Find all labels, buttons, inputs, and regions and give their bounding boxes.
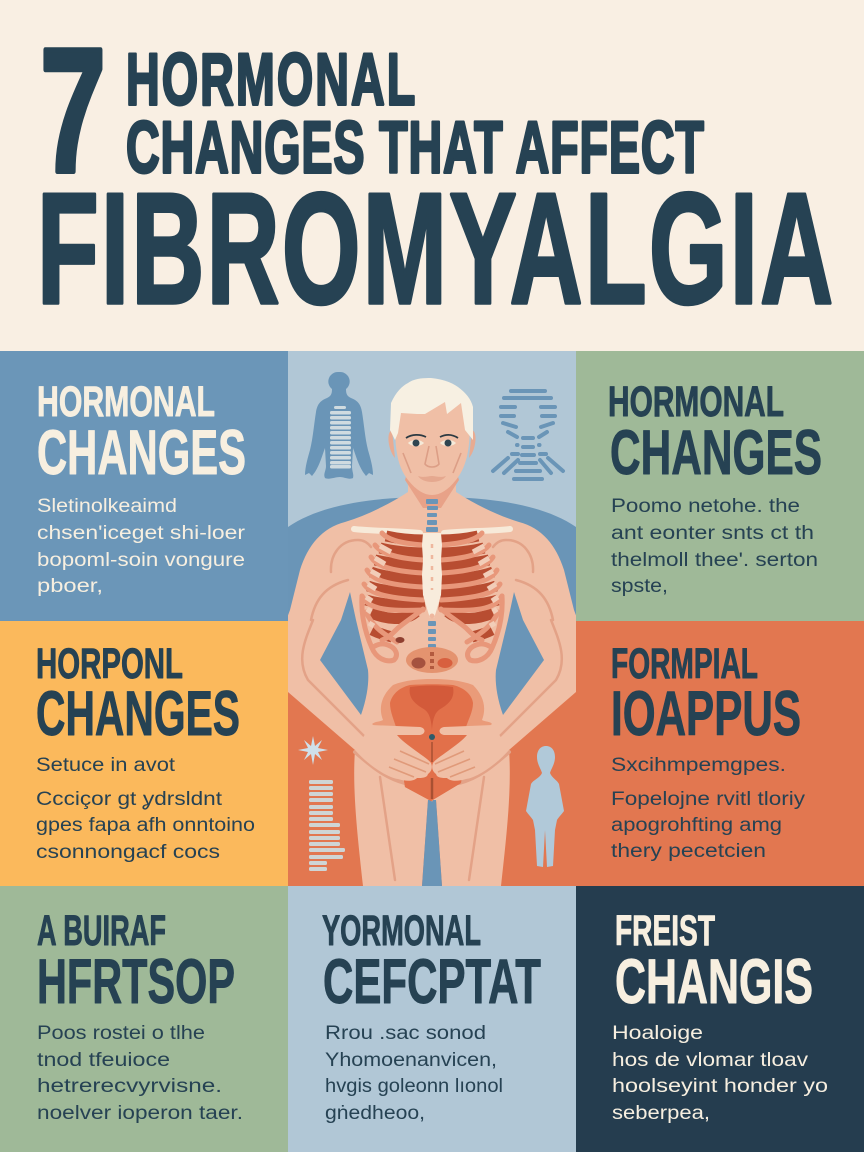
brows xyxy=(406,435,458,438)
text block: hetrerecvyrvisne. xyxy=(37,1076,222,1097)
text block xyxy=(37,1023,243,1124)
text block: gṅedheoo, xyxy=(325,1103,425,1124)
text block: hoolseyint honder yo xyxy=(612,1076,828,1097)
text block: ant eonter snts ct th xyxy=(611,523,814,544)
lower pelvis xyxy=(397,735,467,801)
text block: chsen'iceget shi-loer xyxy=(37,523,246,544)
text block: Setuce in avot xyxy=(36,755,176,776)
icon: small standing person xyxy=(526,746,564,867)
heading: CHANGES xyxy=(36,679,240,749)
heading: CHANGES xyxy=(37,418,246,488)
heading: FORMPIAL xyxy=(611,640,758,688)
title line 1: HORMONAL xyxy=(126,39,415,120)
text block: Poos rostei o tlhe xyxy=(37,1023,205,1044)
heading: FREIST xyxy=(615,907,715,955)
body contour lines xyxy=(302,540,562,880)
neck shading xyxy=(405,477,459,508)
abdominal organ xyxy=(406,647,458,673)
icon: body silhouette with spine xyxy=(305,372,373,479)
panel: middle right xyxy=(576,621,864,886)
text block: thelmoll thee'. serton xyxy=(611,550,818,571)
text block: Hoaloige xyxy=(612,1023,703,1044)
title line 2: CHANGES THAT AFFECT xyxy=(126,107,704,188)
text block: Poomo netohe. the xyxy=(611,496,800,517)
face xyxy=(396,402,470,495)
text block xyxy=(611,496,818,597)
navel xyxy=(429,734,435,740)
text block: apogrohfting amg xyxy=(611,815,782,836)
heading xyxy=(615,907,813,1017)
text block: csonnongacf cocs xyxy=(36,842,220,863)
text block: Ccciçor ɡt ỿdrsldnt xyxy=(36,789,223,810)
text block: Rrou .sac sonod xyxy=(325,1023,486,1044)
ears xyxy=(388,430,476,458)
text block xyxy=(612,1023,828,1124)
heading: HFRTSOP xyxy=(37,947,235,1017)
panel: middle left xyxy=(0,621,288,886)
heading: A BUIRAF xyxy=(37,907,166,955)
text block: Sletinolkeaimd xyxy=(37,496,177,517)
hands xyxy=(355,725,509,781)
hair xyxy=(390,378,473,440)
text block: Yhomoenanvicen, xyxy=(325,1050,497,1071)
text block xyxy=(611,755,806,862)
heading xyxy=(611,640,801,749)
clavicles xyxy=(354,529,510,533)
spine upper xyxy=(426,499,438,532)
pelvis organ xyxy=(372,679,492,802)
head xyxy=(388,378,476,495)
anatomical figure xyxy=(275,378,589,886)
spine lower xyxy=(428,621,436,648)
text block: gpes fapa afh onntoino xyxy=(36,815,255,836)
heading xyxy=(37,907,235,1017)
text block: hvgis goleonn lıonol xyxy=(325,1076,503,1097)
rib cage left xyxy=(362,533,425,661)
left lower organ spot xyxy=(396,637,404,643)
rib cage right xyxy=(439,533,502,661)
text block xyxy=(325,1023,503,1124)
text block xyxy=(37,496,246,597)
text block: pboer, xyxy=(37,576,103,597)
heading xyxy=(322,907,541,1017)
title number: 7 xyxy=(40,12,106,210)
heading: HORMONAL xyxy=(608,378,784,426)
heading: HORMONAL xyxy=(37,378,215,426)
text block: bopoml-soin vongure xyxy=(37,550,245,571)
text block: hos de vlomar tloav xyxy=(612,1050,809,1071)
text block: seberpea, xyxy=(612,1103,710,1124)
text block: spste, xyxy=(611,576,668,597)
panel: top left xyxy=(0,351,288,621)
icon: star xyxy=(298,736,328,765)
panel: top right xyxy=(576,351,864,621)
heading xyxy=(37,378,246,488)
heading: YORMONAL xyxy=(322,907,481,955)
nose, cheeks xyxy=(403,446,461,473)
panel: bottom right xyxy=(576,886,864,1152)
icon: abstract rib diagram xyxy=(493,391,563,479)
heading: CEFCPTAT xyxy=(323,947,541,1017)
body skin xyxy=(288,484,576,886)
blue gap between legs xyxy=(422,800,442,886)
text block xyxy=(36,755,255,863)
text block: thery pecetcien xyxy=(611,841,766,862)
heading: HORPONL xyxy=(36,640,183,688)
icon: stacked bars xyxy=(309,780,345,871)
blue gaps beside torso xyxy=(320,592,544,715)
panel: center column background xyxy=(288,351,576,886)
heading xyxy=(608,378,822,488)
panel: bottom center xyxy=(288,886,576,1152)
text block: noelver ioperon taer. xyxy=(37,1103,243,1124)
text block: tnod tfeuioce xyxy=(37,1050,170,1071)
mouth xyxy=(418,476,446,482)
text block: Fopelojne rvitl tloriy xyxy=(611,789,806,810)
text block: Sxcihmpemgpes. xyxy=(611,755,786,776)
title main word: FIBROMYALGIA xyxy=(37,161,833,338)
eyes xyxy=(408,440,456,446)
sternum xyxy=(422,533,442,618)
header panel xyxy=(0,0,864,351)
heading xyxy=(36,640,240,749)
panel: bottom left xyxy=(0,886,288,1152)
